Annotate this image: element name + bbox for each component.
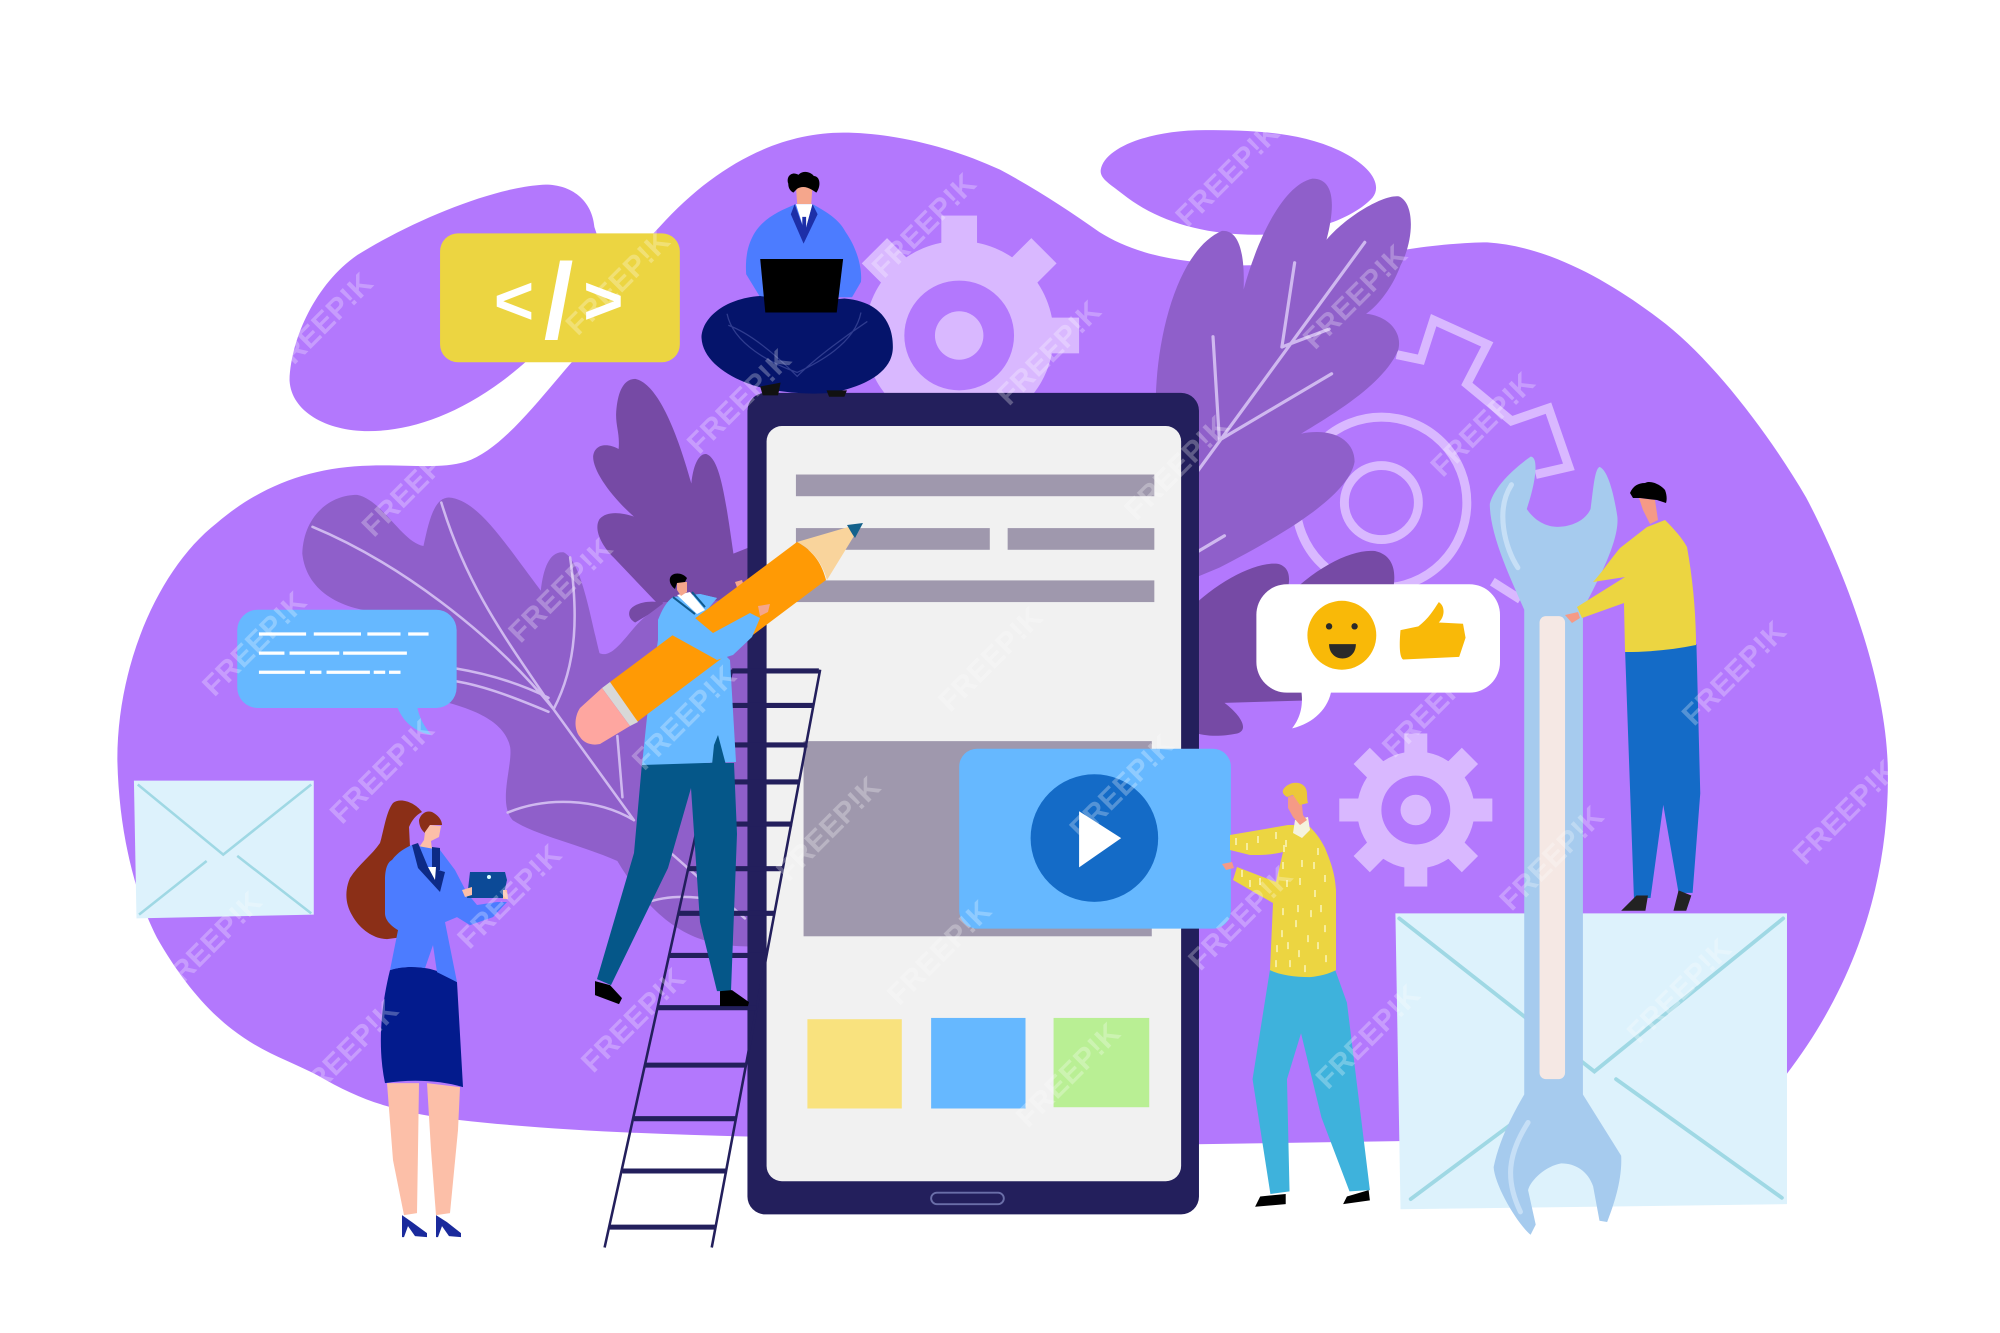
- shoes: [1255, 1190, 1370, 1207]
- phone body: [747, 393, 1199, 1214]
- watermark: FREEPIK text repeated: FREEP!K: [1493, 799, 1611, 917]
- hand: [1222, 862, 1234, 870]
- person: woman with tablet: [346, 800, 508, 1237]
- watermark: FREEPIK text repeated: FREEP!K: [355, 426, 473, 543]
- background blob: top right: [1101, 130, 1376, 235]
- watermark: FREEPIK text repeated: FREEP!K: [1787, 753, 1904, 871]
- torso and arm over pencil: [658, 594, 760, 660]
- person: sitting man with laptop: [702, 172, 893, 397]
- hands: [462, 887, 508, 899]
- code symbol: [494, 241, 623, 361]
- watermark: FREEPIK text repeated: FREEP!K: [932, 600, 1049, 718]
- watermark: FREEPIK text repeated: FREEP!K: [575, 961, 692, 1079]
- blouse: [428, 867, 436, 880]
- video player card: [959, 749, 1231, 929]
- skirt: [381, 967, 463, 1087]
- wrench highlight: [1540, 616, 1565, 1079]
- gear: outlined right: [1296, 320, 1569, 600]
- person: man in yellow sweater: [1222, 783, 1370, 1207]
- watermark: FREEPIK text repeated: FREEP!K: [1182, 859, 1299, 977]
- person: man behind wrench (trousers and shoes): [1621, 644, 1700, 911]
- legs: [387, 1083, 460, 1215]
- watermark: FREEPIK text repeated: [151, 116, 1904, 1134]
- gear: small right: [1339, 733, 1492, 887]
- colour tile: green: [1054, 1018, 1149, 1107]
- hair: [670, 574, 687, 589]
- watermark: FREEPIK text repeated: FREEP!K: [1376, 646, 1493, 764]
- shirt: [642, 594, 736, 765]
- leaf: right large: [1148, 179, 1411, 587]
- watermark: FREEPIK text repeated: FREEP!K: [991, 294, 1108, 412]
- hand: [1565, 612, 1580, 623]
- watermark: FREEPIK text repeated: FREEP!K: [502, 531, 620, 649]
- colour tile: blue: [931, 1018, 1026, 1108]
- watermark: FREEPIK text repeated: FREEP!K: [1310, 978, 1427, 1095]
- ladder: [605, 670, 820, 1248]
- watermark: FREEPIK text repeated: FREEP!K: [1676, 614, 1793, 732]
- background blob: top left: [290, 185, 599, 431]
- watermark: FREEPIK text repeated: FREEP!K: [1010, 1016, 1127, 1134]
- sweater flecks: [1236, 832, 1326, 972]
- head: [1639, 498, 1658, 524]
- jacket lapels: [412, 843, 445, 892]
- trousers: [597, 763, 737, 991]
- head: [677, 582, 687, 596]
- watermark: FREEPIK text repeated: FREEP!K: [288, 993, 405, 1111]
- code bubble: [440, 233, 680, 362]
- watermark: FREEPIK text repeated: FREEP!K: [262, 266, 380, 384]
- watermark: FREEPIK text repeated: FREEP!K: [681, 343, 798, 460]
- leaf: lower right dark: [1186, 551, 1394, 736]
- colour tile: yellow: [807, 1019, 902, 1108]
- cuff and hand: [758, 604, 770, 616]
- shoes: [595, 981, 749, 1006]
- leaf veins: [1195, 242, 1365, 552]
- watermark: FREEPIK text repeated: FREEP!K: [196, 585, 314, 703]
- watermark: FREEPIK text repeated: FREEP!K: [1118, 409, 1236, 527]
- face and neck: [420, 825, 441, 880]
- wrench: [1490, 457, 1621, 1235]
- hair top: [419, 811, 442, 833]
- leaf: small dark lobe: [629, 602, 663, 622]
- leaf veins: [312, 503, 745, 918]
- hand behind pencil: [735, 580, 744, 590]
- envelope: left: [134, 781, 314, 918]
- code symbol: >: [583, 262, 623, 339]
- head: [1288, 795, 1307, 825]
- background blob: main purple: [117, 133, 1888, 1144]
- hair: [1283, 783, 1308, 805]
- watermark: FREEPIK text repeated: FREEP!K: [1424, 366, 1542, 483]
- smiley emoji: [1307, 601, 1376, 670]
- person: man with pencil on ladder: [576, 523, 863, 1006]
- watermark: FREEPIK text repeated: FREEP!K: [881, 894, 998, 1011]
- watermark: FREEPIK text repeated: FREEP!K: [770, 770, 888, 888]
- tablet: [467, 872, 507, 898]
- watermark: FREEPIK text repeated: FREEP!K: [560, 224, 677, 342]
- shoes: [402, 1215, 461, 1237]
- watermark: FREEPIK text repeated: FREEP!K: [866, 167, 983, 284]
- leaf: left large: [302, 495, 753, 946]
- watermark: FREEPIK text repeated: FREEP!K: [1063, 728, 1181, 845]
- trousers: [1253, 967, 1370, 1194]
- ponytail: [346, 800, 422, 939]
- collar: [677, 592, 705, 614]
- play button: [1031, 774, 1158, 902]
- thumbs up icon: [1400, 602, 1466, 659]
- person: man with wrench (torso): [1565, 482, 1696, 652]
- speech bubble: blue message: [237, 610, 457, 735]
- watermark: FREEPIK text repeated: FREEP!K: [1621, 932, 1738, 1050]
- message lines: [259, 634, 429, 672]
- watermark: FREEPIK text repeated: FREEP!K: [1297, 238, 1414, 356]
- envelope: large: [1395, 913, 1787, 1209]
- watermark: FREEPIK text repeated: FREEP!K: [151, 885, 269, 1002]
- home button: [931, 1193, 1004, 1204]
- screen image block: [804, 741, 1152, 936]
- watermark: FREEPIK text repeated: FREEP!K: [324, 713, 441, 830]
- code symbol: <: [494, 262, 534, 339]
- sweater: [1230, 825, 1336, 977]
- leaf: centre dark: [593, 379, 753, 625]
- gear: top centre: [839, 216, 1079, 430]
- screen text bars: [796, 475, 1154, 602]
- sweater: [1577, 520, 1696, 652]
- collar: [1293, 817, 1310, 838]
- pencil: [576, 523, 863, 745]
- hair: [1630, 482, 1667, 503]
- speech bubble: reactions: [1256, 584, 1500, 728]
- watermark: FREEPIK text repeated: FREEP!K: [451, 838, 569, 955]
- watermark: FREEPIK text repeated: FREEP!K: [1169, 116, 1287, 233]
- jacket: [385, 845, 507, 982]
- watermark: FREEPIK text repeated: FREEP!K: [626, 659, 743, 777]
- phone screen: [767, 426, 1181, 1181]
- code symbol: /: [544, 241, 574, 361]
